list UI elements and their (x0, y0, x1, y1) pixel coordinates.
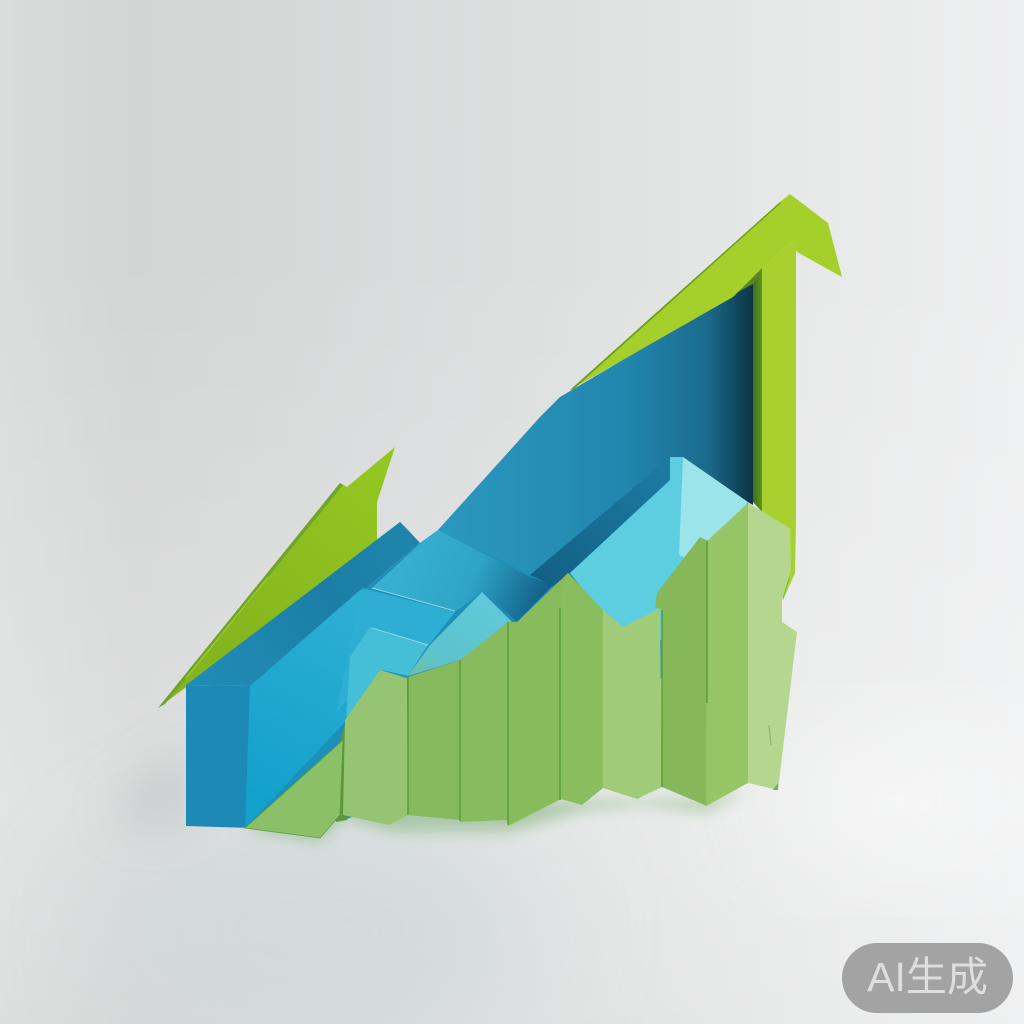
pale face (679, 457, 748, 560)
small fold (782, 577, 790, 600)
vertical column (762, 241, 796, 600)
bar 5 (561, 573, 603, 805)
corner triangle (245, 740, 343, 838)
bar 7 (655, 537, 708, 806)
dark band (530, 457, 670, 586)
bar 4 (508, 573, 568, 825)
panel: upper light blue layer (530, 457, 748, 640)
light front face (245, 590, 372, 828)
step sheet (336, 588, 455, 712)
mid blue top sheet (372, 530, 553, 622)
cyan face (570, 457, 690, 640)
arrow: small left green arrow (158, 447, 395, 708)
panel: left blue folded column (186, 522, 420, 828)
teal fold (408, 592, 512, 676)
bar 6 (603, 608, 662, 799)
bar 1 (343, 670, 408, 825)
dark front face (186, 685, 251, 828)
arrow: large green arrow (570, 194, 842, 600)
panel: dark blue back sheet (438, 283, 753, 590)
bars: green folded panels (245, 503, 797, 838)
bar 9 pale (748, 503, 797, 790)
column side (753, 268, 762, 512)
badge: AI generated (842, 943, 1013, 1013)
fold shadow between triangle and bar 1 (336, 715, 347, 822)
band dark edge (570, 202, 781, 390)
bar 3 (460, 622, 508, 822)
panel: mid blue layers (336, 530, 553, 720)
lowest step (346, 627, 428, 720)
floor shadow (245, 790, 748, 842)
cast shadow under head (738, 267, 763, 292)
wall shadow (110, 740, 190, 826)
badge: AI generated: AI生成 (867, 954, 988, 1000)
backing fill behind layers (245, 502, 748, 828)
trough (186, 522, 420, 686)
arrow head and diagonal band (570, 194, 842, 390)
bar 8 (706, 503, 748, 806)
bar 2 (408, 660, 460, 820)
